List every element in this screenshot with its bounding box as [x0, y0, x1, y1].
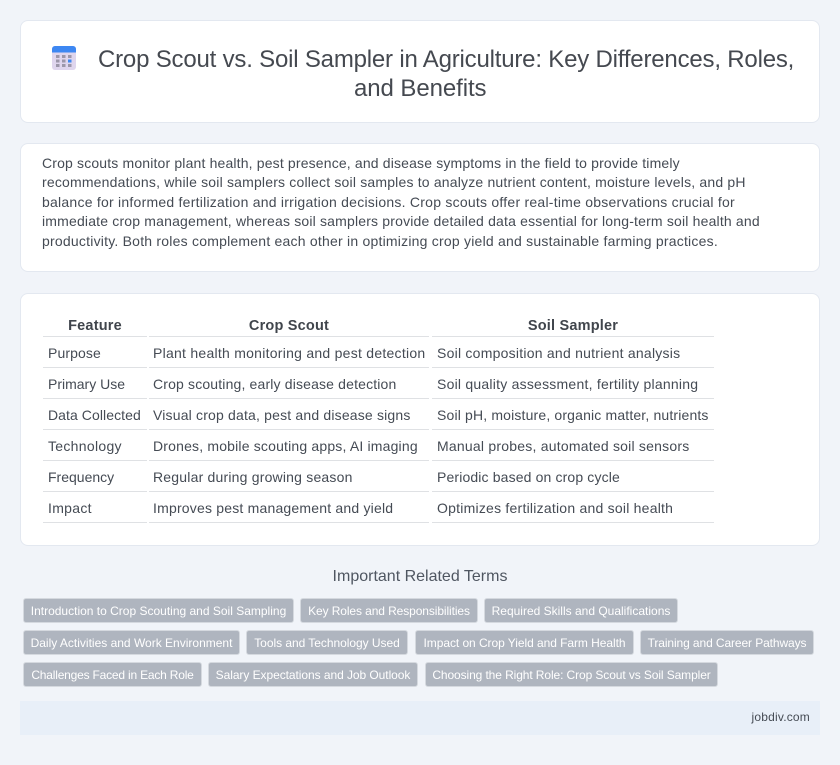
row: Purpose	[48, 345, 680, 361]
row: Data Collected: Data Collected	[48, 407, 141, 423]
intro paragraph: immediate crop management, whereas soil samplers provide detailed data essential for long-term soil health and	[42, 213, 760, 229]
icon: calendar grid	[52, 46, 76, 70]
intro paragraph	[42, 154, 760, 249]
row: Purpose: Purpose	[48, 345, 101, 361]
row: Impact: Optimizes fertilization and soil health	[437, 500, 673, 516]
tag: Introduction to Crop Scouting and Soil Sampling	[31, 604, 286, 618]
tag: Impact on Crop Yield and Farm Health	[424, 636, 625, 650]
row: Primary Use	[48, 376, 698, 392]
tag	[640, 630, 814, 655]
tag group: related terms	[23, 598, 814, 687]
table header: Soil Sampler: Soil Sampler	[528, 318, 618, 334]
row: Frequency: Frequency	[48, 469, 114, 485]
row: Frequency: Regular during growing season	[153, 469, 353, 485]
comparison table	[43, 317, 714, 523]
intro paragraph: recommendations, while soil samplers collect soil samples to analyze nutrient content, moisture levels, and pH	[42, 174, 746, 190]
tag: Required Skills and Qualifications	[492, 604, 670, 618]
tag	[23, 662, 202, 687]
row: Purpose: Plant health monitoring and pest detection	[153, 345, 425, 361]
footer source: jobdiv.com	[752, 710, 810, 724]
comparison table card	[20, 293, 820, 546]
row: Data Collected: Soil pH, moisture, organic matter, nutrients	[437, 407, 709, 423]
intro paragraph card	[20, 143, 820, 272]
intro paragraph: Crop scouts monitor plant health, pest presence, and disease symptoms in the field to provide timely	[42, 154, 680, 170]
tag: Choosing the Right Role: Crop Scout vs Soil Sampler	[432, 668, 711, 682]
footer bar	[20, 701, 820, 735]
table header: Crop Scout: Crop Scout	[249, 318, 329, 334]
table header: Feature: Feature	[68, 318, 122, 334]
tag: Training and Career Pathways	[648, 636, 806, 650]
row: Technology: Manual probes, automated soil sensors	[437, 438, 690, 454]
tag: Salary Expectations and Job Outlook	[216, 668, 410, 682]
title: Crop Scout vs. Soil Sampler in Agriculture: Key Differences, Roles,	[98, 46, 794, 73]
tag: Tools and Technology Used	[254, 636, 400, 650]
row: Frequency: Periodic based on crop cycle	[437, 469, 620, 485]
row: Technology	[48, 438, 690, 454]
tag	[246, 630, 408, 655]
tag	[425, 662, 718, 687]
row: Primary Use: Primary Use	[48, 376, 125, 392]
row: Primary Use: Soil quality assessment, fertility planning	[437, 376, 698, 392]
row: Frequency	[48, 469, 620, 485]
row: Purpose: Soil composition and nutrient analysis	[437, 345, 680, 361]
intro paragraph: productivity. Both roles complement each other in optimizing crop yield and sustainable farming practices.	[42, 233, 718, 249]
row: Technology: Technology	[48, 438, 122, 454]
tag	[415, 630, 634, 655]
intro paragraph: balance for informed fertilization and irrigation decisions. Crop scouts offer real-time observations crucial for	[42, 194, 735, 210]
row: Impact: Improves pest management and yield	[153, 500, 393, 516]
row: Technology: Drones, mobile scouting apps, AI imaging	[153, 438, 418, 454]
row: Primary Use: Crop scouting, early disease detection	[153, 376, 396, 392]
tag	[23, 598, 294, 623]
row: Impact: Impact	[48, 500, 92, 516]
row: Impact	[48, 500, 673, 516]
tag: Key Roles and Responsibilities	[308, 604, 470, 618]
tag	[300, 598, 478, 623]
tag	[208, 662, 418, 687]
title	[98, 46, 794, 102]
header card	[20, 20, 820, 123]
title: and Benefits	[354, 75, 486, 102]
related terms heading: Important Related Terms	[333, 568, 507, 585]
row: Data Collected	[48, 407, 709, 423]
tag: Challenges Faced in Each Role	[31, 668, 194, 682]
tag: Daily Activities and Work Environment	[31, 636, 232, 650]
tag	[23, 630, 240, 655]
tag	[484, 598, 678, 623]
row: Data Collected: Visual crop data, pest and disease signs	[153, 407, 411, 423]
